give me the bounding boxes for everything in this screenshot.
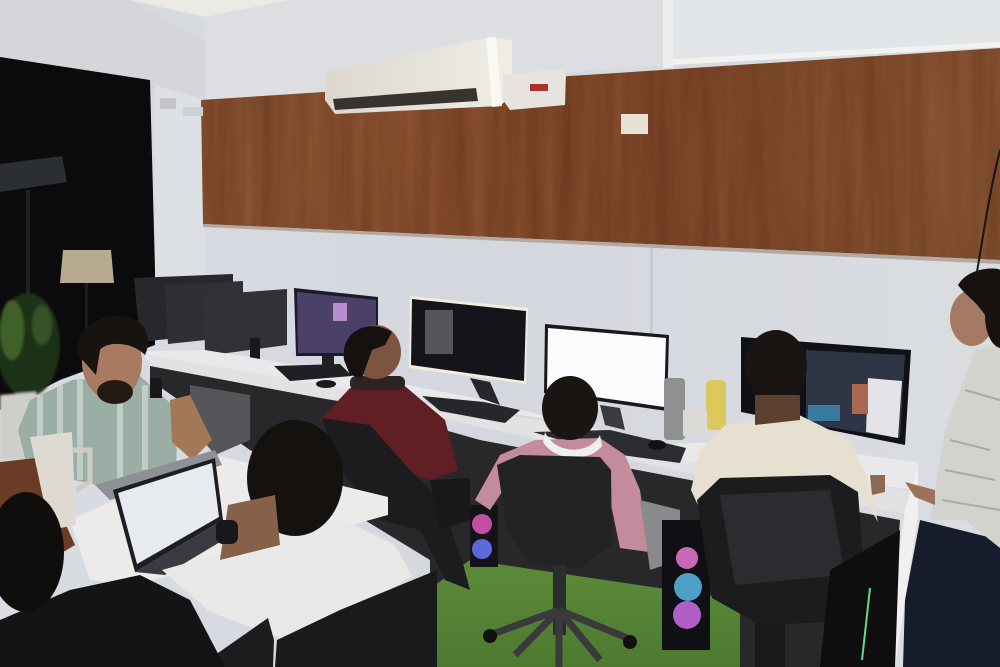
- white mug: [30, 432, 90, 530]
- person: seated in pink shirt: [475, 376, 649, 552]
- back row monitors: [134, 274, 287, 366]
- studio light on stand: [0, 156, 67, 400]
- PC tower with RGB fans: right: [640, 500, 710, 650]
- handbag: [0, 458, 75, 560]
- steel water bottle: [664, 378, 685, 440]
- monitor: photo editor: [741, 337, 911, 445]
- white box on desk: [683, 410, 707, 436]
- office chair: front left: [208, 618, 274, 667]
- office chair: centre: [322, 418, 470, 590]
- green carpet floor: [428, 560, 740, 667]
- PC tower with RGB fans: centre: [470, 505, 498, 567]
- person: seated centre in maroon shirt: [320, 325, 458, 480]
- monitor: dark editor: [409, 296, 528, 405]
- open laptop: [113, 458, 240, 575]
- wall cable: [977, 150, 1000, 272]
- monitor: purple interface: [294, 288, 378, 368]
- floor lamp: [60, 250, 114, 343]
- potted plant: [0, 293, 60, 460]
- drawer unit under desk: [190, 385, 250, 455]
- voltage stabilizer: [503, 69, 566, 110]
- small grey laptop: [95, 450, 222, 500]
- person: front centre in white shirt: [162, 420, 412, 645]
- black curtain backdrop: [0, 57, 155, 410]
- air conditioner: [325, 37, 512, 114]
- person: seated in cream shirt: [691, 330, 885, 522]
- person: standing right: [903, 269, 1000, 667]
- person: seated left in striped shirt: [18, 316, 212, 490]
- security camera: [160, 98, 203, 116]
- long white desk: [145, 350, 918, 667]
- power socket: [621, 114, 648, 134]
- monitor: white document: [544, 324, 669, 430]
- white meeting table: [70, 455, 388, 585]
- office chair: pink shirt person: [483, 455, 637, 667]
- keyboard: desk two: [422, 396, 520, 423]
- keyboard and mouse: desk one: [274, 364, 352, 388]
- PC tower: far right: [820, 530, 900, 667]
- person: front left in black shirt: [0, 492, 225, 667]
- wood wall panel: [201, 48, 1000, 264]
- office chair: front centre: [275, 570, 437, 667]
- dark cabinet under desk: [150, 365, 900, 667]
- keyboard and mousepad: desk three: [533, 430, 686, 463]
- office chair: cream shirt person: [697, 475, 866, 667]
- yellow water bottle: [706, 380, 726, 430]
